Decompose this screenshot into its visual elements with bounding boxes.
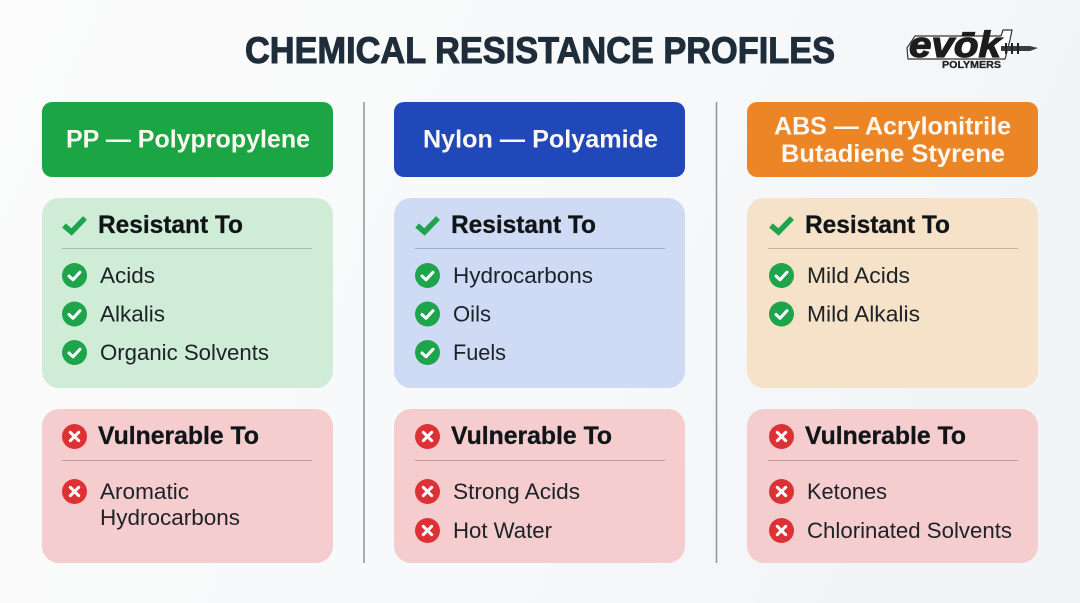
panel: Nylon resistant: Resistant To — [451, 211, 596, 239]
header: PP — [42, 102, 333, 177]
panel: ABS vulnerable: Vulnerable To — [805, 422, 966, 450]
panel: Nylon resistant: Hydrocarbons — [453, 263, 593, 288]
panel: ABS resistant: Mild Acids — [807, 263, 910, 288]
panel: PP vulnerable — [42, 409, 333, 563]
header: PP: PP — Polypropylene — [66, 126, 310, 154]
divider: left — [363, 102, 365, 563]
column: PP — [42, 102, 333, 563]
panel: PP vulnerable: Vulnerable To — [98, 422, 259, 450]
header: Nylon — [394, 102, 685, 177]
column: ABS — [747, 102, 1038, 563]
column: Nylon — [394, 102, 685, 563]
panel: PP resistant: Alkalis — [100, 302, 165, 326]
logo: evok polymers: evōk — [909, 24, 1003, 65]
panel: PP vulnerable: Hydrocarbons — [100, 505, 240, 530]
header: ABS — [747, 102, 1038, 177]
panel: PP resistant — [42, 198, 333, 388]
panel: Nylon vulnerable — [394, 409, 685, 563]
panel: ABS resistant: Mild Alkalis — [807, 302, 920, 326]
panel: ABS resistant — [747, 198, 1038, 388]
panel: Nylon resistant — [394, 198, 685, 388]
panel: Nylon vulnerable: Vulnerable To — [451, 422, 612, 450]
header: ABS: ABS — Acrylonitrile — [774, 112, 1011, 140]
panel: PP vulnerable: Aromatic — [100, 479, 189, 504]
header: Nylon: Nylon — Polyamide — [423, 126, 658, 154]
logo: evok polymers: POLYMERS — [942, 59, 1001, 71]
panel: Nylon resistant: Fuels — [453, 340, 506, 365]
panel: Nylon resistant: Oils — [453, 302, 491, 326]
panel: PP resistant: Acids — [100, 263, 155, 288]
panel: PP resistant: Organic Solvents — [100, 340, 269, 365]
panel: ABS vulnerable — [747, 409, 1038, 563]
title: CHEMICAL RESISTANCE PROFILES — [245, 30, 835, 71]
panel: ABS resistant: Resistant To — [805, 211, 950, 239]
divider: right — [716, 102, 718, 563]
panel: PP resistant: Resistant To — [98, 211, 243, 239]
header: ABS: Butadiene Styrene — [781, 140, 1005, 168]
panel: Nylon vulnerable: Strong Acids — [453, 479, 580, 504]
logo: evok polymers — [907, 24, 1038, 71]
panel: ABS vulnerable: Ketones — [807, 479, 887, 504]
panel: Nylon vulnerable: Hot Water — [453, 518, 552, 543]
panel: ABS vulnerable: Chlorinated Solvents — [807, 518, 1012, 543]
